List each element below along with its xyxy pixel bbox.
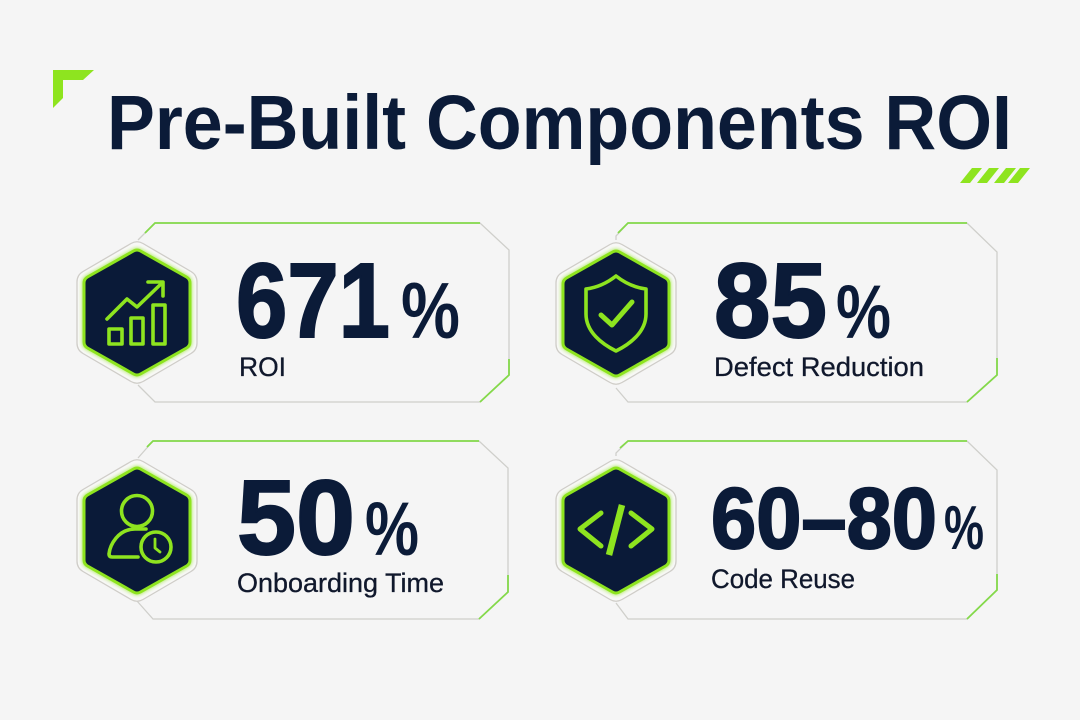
value: 50 [237,459,355,577]
value: 60–80 [711,471,937,567]
panel: Code Reuse [556,441,997,619]
icon: shield check in hexagon [556,243,676,384]
panel: ROI [77,223,509,402]
card outline [616,441,997,619]
card outline [137,441,508,619]
card outline [138,223,509,402]
value [237,459,419,577]
card outline [616,223,997,402]
stripe accent [960,168,1030,183]
label: Code Reuse [711,564,855,594]
panel: Defect Reduction [556,223,997,402]
corner accent top-left [53,70,94,108]
label: Defect Reduction [714,352,924,382]
title: Pre-Built Components ROI [107,80,1012,166]
panel: Onboarding Time [77,441,508,619]
value: % [944,494,984,563]
value: % [401,266,460,355]
value: 85 [714,242,827,360]
icon: growth chart in hexagon [77,242,197,383]
value [714,242,891,360]
icon: person with clock in hexagon [77,460,197,601]
label: Onboarding Time [237,568,444,598]
value: % [365,487,419,572]
icon: code brackets in hexagon [556,460,676,601]
value: 671 [236,242,390,360]
label: ROI [239,352,286,382]
value: % [836,270,891,355]
